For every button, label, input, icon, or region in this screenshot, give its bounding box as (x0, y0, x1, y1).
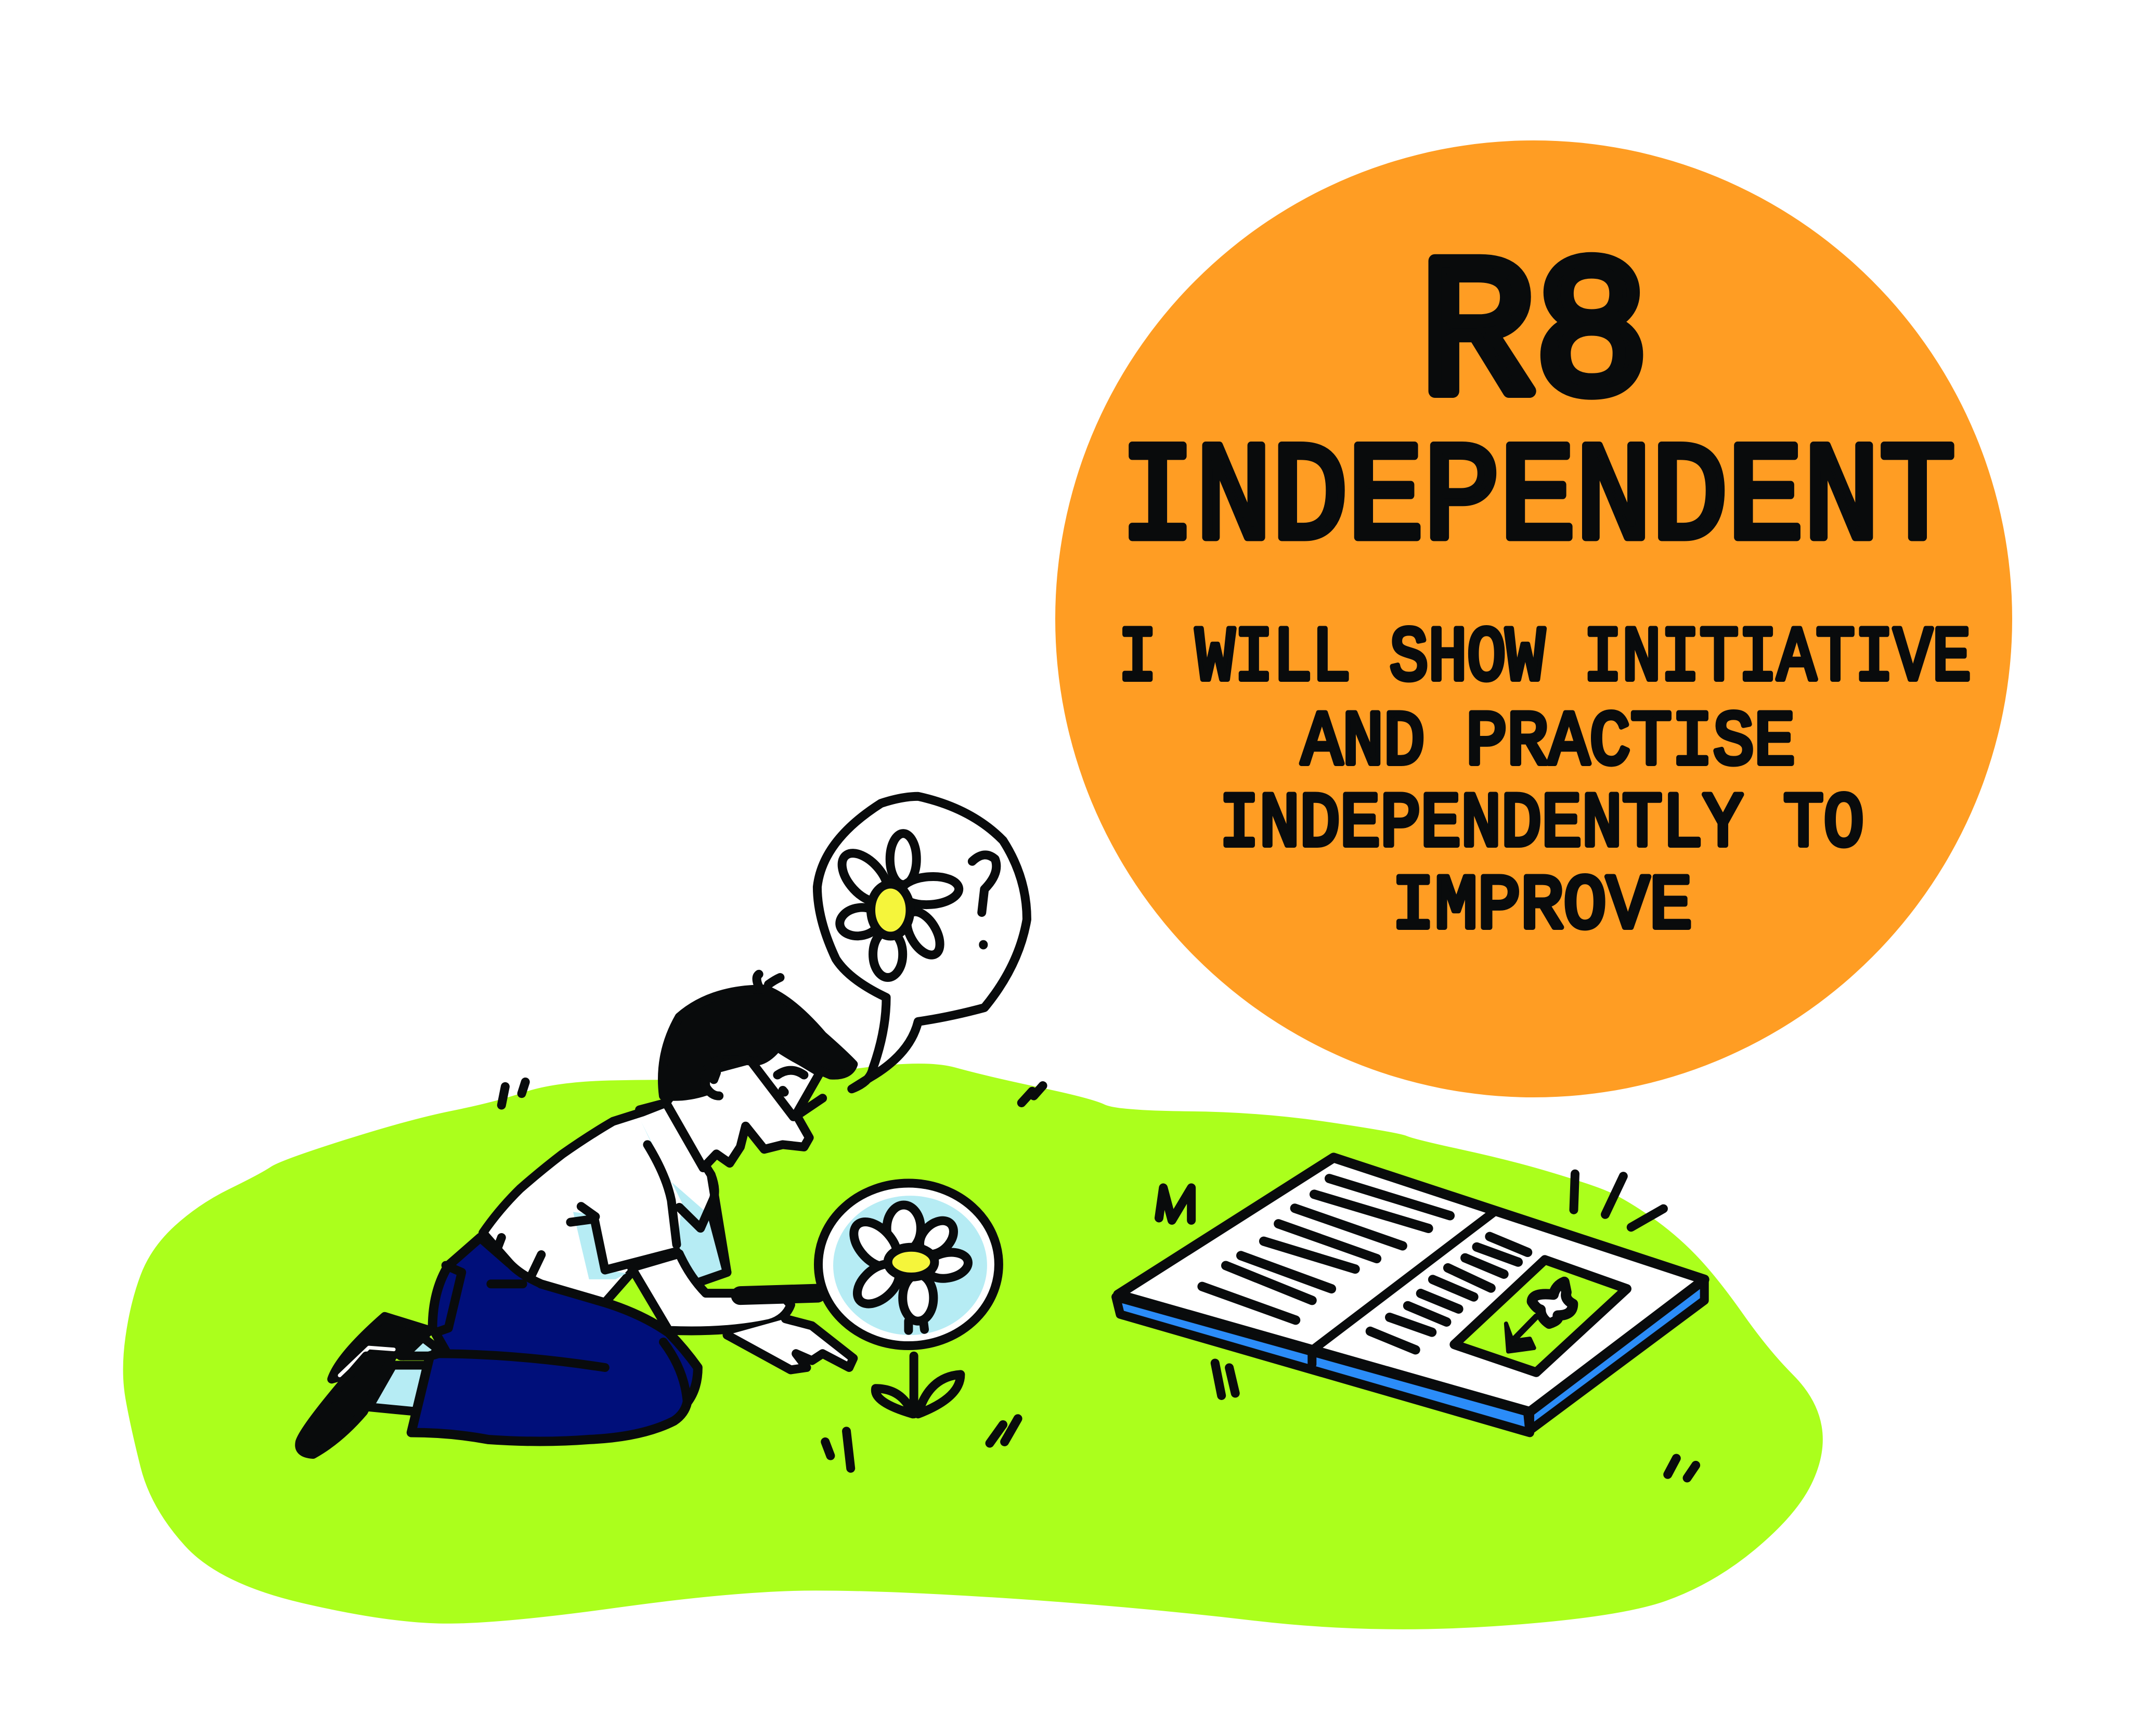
text block: pledge: IMPROVE (1392, 864, 1692, 951)
icon: magnified flower (845, 1205, 972, 1330)
right page text lines (1370, 1237, 1527, 1350)
book centre fold (1312, 1211, 1495, 1364)
text block: pledge: INDEPENDENTLY TO (1219, 782, 1864, 869)
magnifier lens (818, 1183, 999, 1346)
text block: pledge: I WILL SHOW INITIATIVE (1118, 616, 1971, 703)
text block: pledge: AND PRACTISE (1301, 700, 1795, 787)
book right edge (1530, 1279, 1704, 1430)
shirt lines (496, 1103, 727, 1281)
face (666, 1047, 820, 1168)
book spine edge (1116, 1297, 1530, 1433)
hair (662, 989, 853, 1096)
forearm (631, 1254, 791, 1331)
book pages (1118, 1158, 1704, 1412)
text block: pledge (1118, 616, 1971, 951)
icon: flower in thought bubble (833, 834, 960, 977)
grass ticks near book (1159, 1174, 1696, 1478)
icon: sprout (875, 1356, 961, 1414)
magnifier handle (740, 1293, 817, 1295)
illustration: kneeling student with magnifier (300, 796, 1043, 1468)
icon: flower and arrow in book picture (1506, 1282, 1573, 1352)
trousers (411, 1238, 698, 1441)
left page text lines (1202, 1178, 1450, 1320)
green grass blob (123, 1064, 1823, 1629)
thought bubble (817, 796, 1027, 1089)
icon: shoes (300, 1316, 430, 1454)
book picture (1454, 1260, 1627, 1372)
heading: R8: R8 (1420, 227, 1649, 451)
orange circle panel (1055, 140, 2012, 1097)
heading: INDEPENDENT: INDEPENDENT (1120, 422, 1955, 579)
lower hand (727, 1319, 853, 1370)
trouser details (435, 1265, 687, 1402)
icon: socks (369, 1333, 438, 1411)
lens tint (833, 1196, 987, 1335)
icon: question mark (972, 855, 996, 945)
illustration: open book (1116, 1158, 1704, 1478)
shirt (483, 1103, 727, 1303)
shirt shading (573, 1121, 727, 1281)
facial details (706, 974, 823, 1117)
grass ticks near student (501, 1082, 1043, 1468)
